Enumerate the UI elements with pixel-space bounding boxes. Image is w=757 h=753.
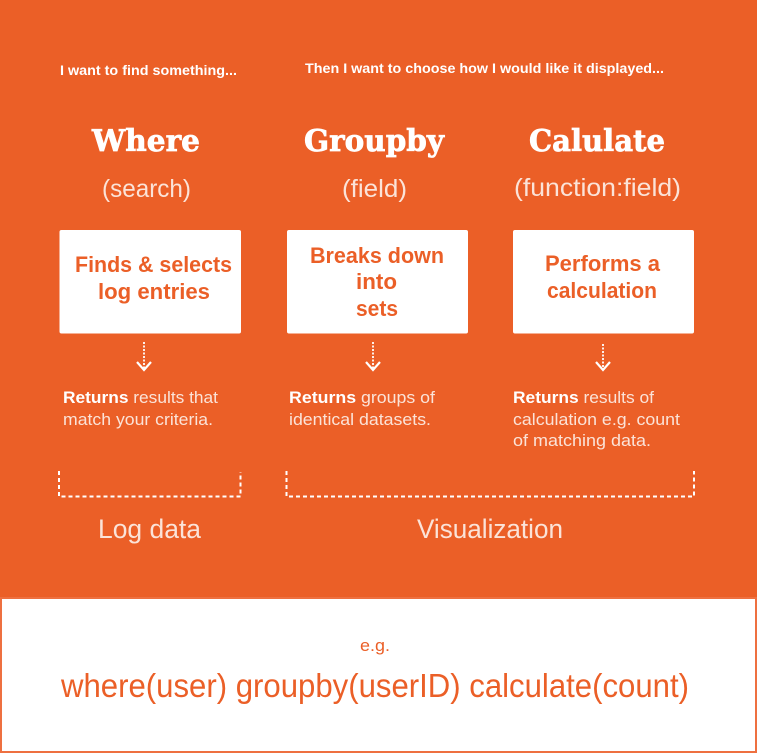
card: finds and selects: Finds & selects (75, 252, 232, 277)
subheading: function field: (function:field) (514, 174, 681, 202)
card: finds and selects: log entries (98, 279, 210, 304)
returns text: calculate: Returns results of (513, 388, 654, 407)
panel: example (1, 598, 756, 752)
returns text: groupby (289, 388, 435, 429)
subheading: search: (search) (102, 175, 191, 203)
arrow: calculate down (596, 344, 610, 370)
card: breaks down: Breaks down (310, 243, 444, 268)
returns text: calculate: calculation e.g. count (513, 410, 680, 429)
returns text: groupby: Returns groups of (289, 388, 435, 407)
example label: e.g. (360, 637, 390, 655)
card: performs a calculation (513, 230, 694, 334)
column: calculate (513, 124, 694, 450)
card: performs a calculation: calculation (547, 278, 657, 303)
column: where (60, 124, 241, 429)
arrow: where down (137, 342, 151, 370)
card: breaks down (287, 230, 468, 334)
label: visualization: Visualization (417, 514, 563, 544)
returns text: where: match your criteria. (63, 410, 213, 429)
label: log data: Log data (98, 514, 202, 544)
card: performs a calculation: Performs a (545, 251, 661, 276)
intro text: find: I want to find something... (60, 62, 237, 78)
returns text: where (63, 388, 218, 429)
returns text: calculate: of matching data. (513, 431, 651, 450)
column: groupby (287, 124, 468, 429)
heading: Calulate: Calulate (529, 124, 665, 159)
intro text: display: Then I want to choose how I would like it displayed... (305, 60, 664, 76)
heading: Groupby: Groupby (304, 124, 446, 159)
card: breaks down: into (356, 269, 397, 294)
card: finds and selects (60, 230, 241, 334)
bracket: visualization (286, 471, 694, 496)
returns text: where: Returns results that (63, 388, 218, 407)
heading: Where: Where (91, 124, 200, 159)
subheading: field: (field) (342, 175, 407, 203)
example query: where(user) groupby(userID) calculate(count) (60, 667, 689, 704)
orange background panel (0, 0, 757, 598)
returns text: groupby: identical datasets. (289, 410, 431, 429)
arrow: groupby down (366, 342, 380, 370)
card: breaks down: sets (356, 296, 398, 321)
returns text: calculate (513, 388, 680, 450)
bracket: log data (59, 471, 240, 496)
